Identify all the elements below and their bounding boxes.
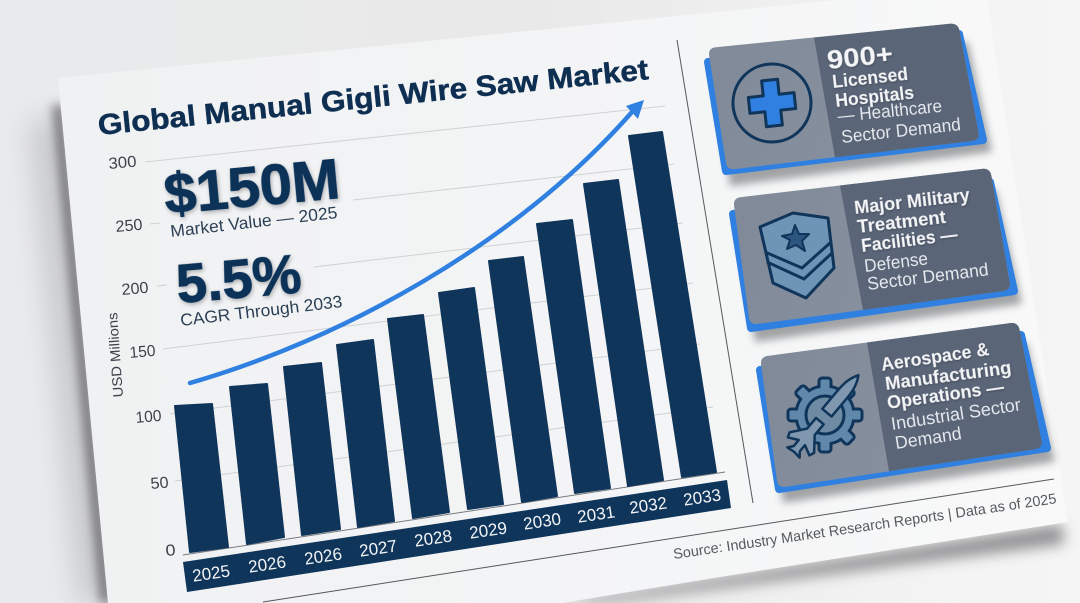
year labels: 2027 — [358, 536, 398, 561]
card text: Hospitals — [834, 83, 915, 111]
card text: Licensed — [831, 64, 909, 92]
stat value: $150M — [161, 147, 342, 227]
y axis title: USD Millions — [104, 312, 126, 398]
year labels: 2028 — [413, 526, 453, 551]
card text: 900+ — [825, 38, 894, 75]
year labels — [191, 485, 722, 586]
card text — [853, 185, 990, 294]
growth arrow — [190, 100, 644, 383]
card text — [880, 339, 1022, 453]
card accent — [708, 34, 983, 171]
bars — [175, 132, 716, 552]
year labels: 2026 — [303, 544, 343, 569]
y axis labels: 0 — [165, 542, 176, 560]
card text: Sector Demand — [866, 259, 990, 294]
card text: Defense — [863, 248, 929, 276]
card: healthcare — [708, 24, 992, 186]
card shadow — [712, 42, 992, 186]
year band — [183, 480, 731, 592]
y axis labels — [108, 154, 176, 560]
paper shadow — [30, 105, 1064, 603]
y axis labels: 50 — [150, 474, 169, 493]
card text: Manufacturing — [884, 358, 1012, 394]
axis line — [183, 472, 725, 555]
y axis labels: 300 — [108, 154, 137, 173]
card text: Demand — [894, 423, 963, 453]
stat value: 5.5% — [174, 242, 304, 315]
year labels: 2025 — [191, 561, 231, 586]
card text: Facilities — — [860, 224, 959, 256]
icon: medical cross — [729, 60, 815, 146]
card text panel — [840, 169, 1010, 310]
footer rule — [263, 479, 1054, 602]
card text: Industrial Sector — [890, 394, 1022, 434]
card text panel — [814, 24, 979, 157]
card text — [825, 38, 962, 147]
card text panel — [867, 323, 1042, 471]
chart grid lines — [145, 106, 713, 481]
card text: Aerospace & — [880, 339, 990, 375]
card icon panel — [709, 24, 979, 169]
year labels: 2026 — [247, 552, 287, 577]
source note: Source: Industry Market Research Reports | Data as of 2025 — [672, 491, 1058, 563]
card icon panel — [734, 169, 1010, 324]
y axis labels: 150 — [129, 343, 156, 362]
icon: gear with aircraft — [781, 365, 871, 463]
stat label: Market Value — 2025 — [169, 203, 338, 241]
card accent — [760, 335, 1047, 489]
year labels: 2032 — [628, 493, 668, 518]
card shadow — [764, 343, 1055, 503]
year labels: 2033 — [682, 485, 722, 510]
card shadow — [737, 190, 1022, 342]
stat label: CAGR Through 2033 — [179, 292, 343, 330]
card: industrial — [760, 323, 1055, 503]
icon: military shield — [760, 213, 834, 298]
stat: CAGR — [174, 242, 343, 330]
card icon panel — [761, 323, 1042, 487]
card accent — [733, 182, 1014, 328]
y axis labels: 100 — [135, 408, 162, 427]
vertical divider — [677, 40, 753, 503]
y axis labels: 250 — [115, 217, 143, 236]
card text: — Healthcare — [836, 96, 943, 126]
card text: Sector Demand — [840, 114, 962, 147]
year labels: 2030 — [522, 509, 562, 534]
card: defense — [733, 169, 1022, 342]
card text: Major Military — [853, 185, 971, 218]
year labels: 2029 — [468, 518, 508, 543]
year labels: 2031 — [576, 502, 616, 527]
stat: market value — [161, 147, 342, 241]
y axis labels: 200 — [121, 280, 149, 299]
title: Global Manual Gigli Wire Saw Market — [96, 54, 650, 142]
card text: Treatment — [856, 207, 947, 237]
bar chart — [104, 100, 731, 592]
card text: Operations — — [886, 377, 1005, 413]
